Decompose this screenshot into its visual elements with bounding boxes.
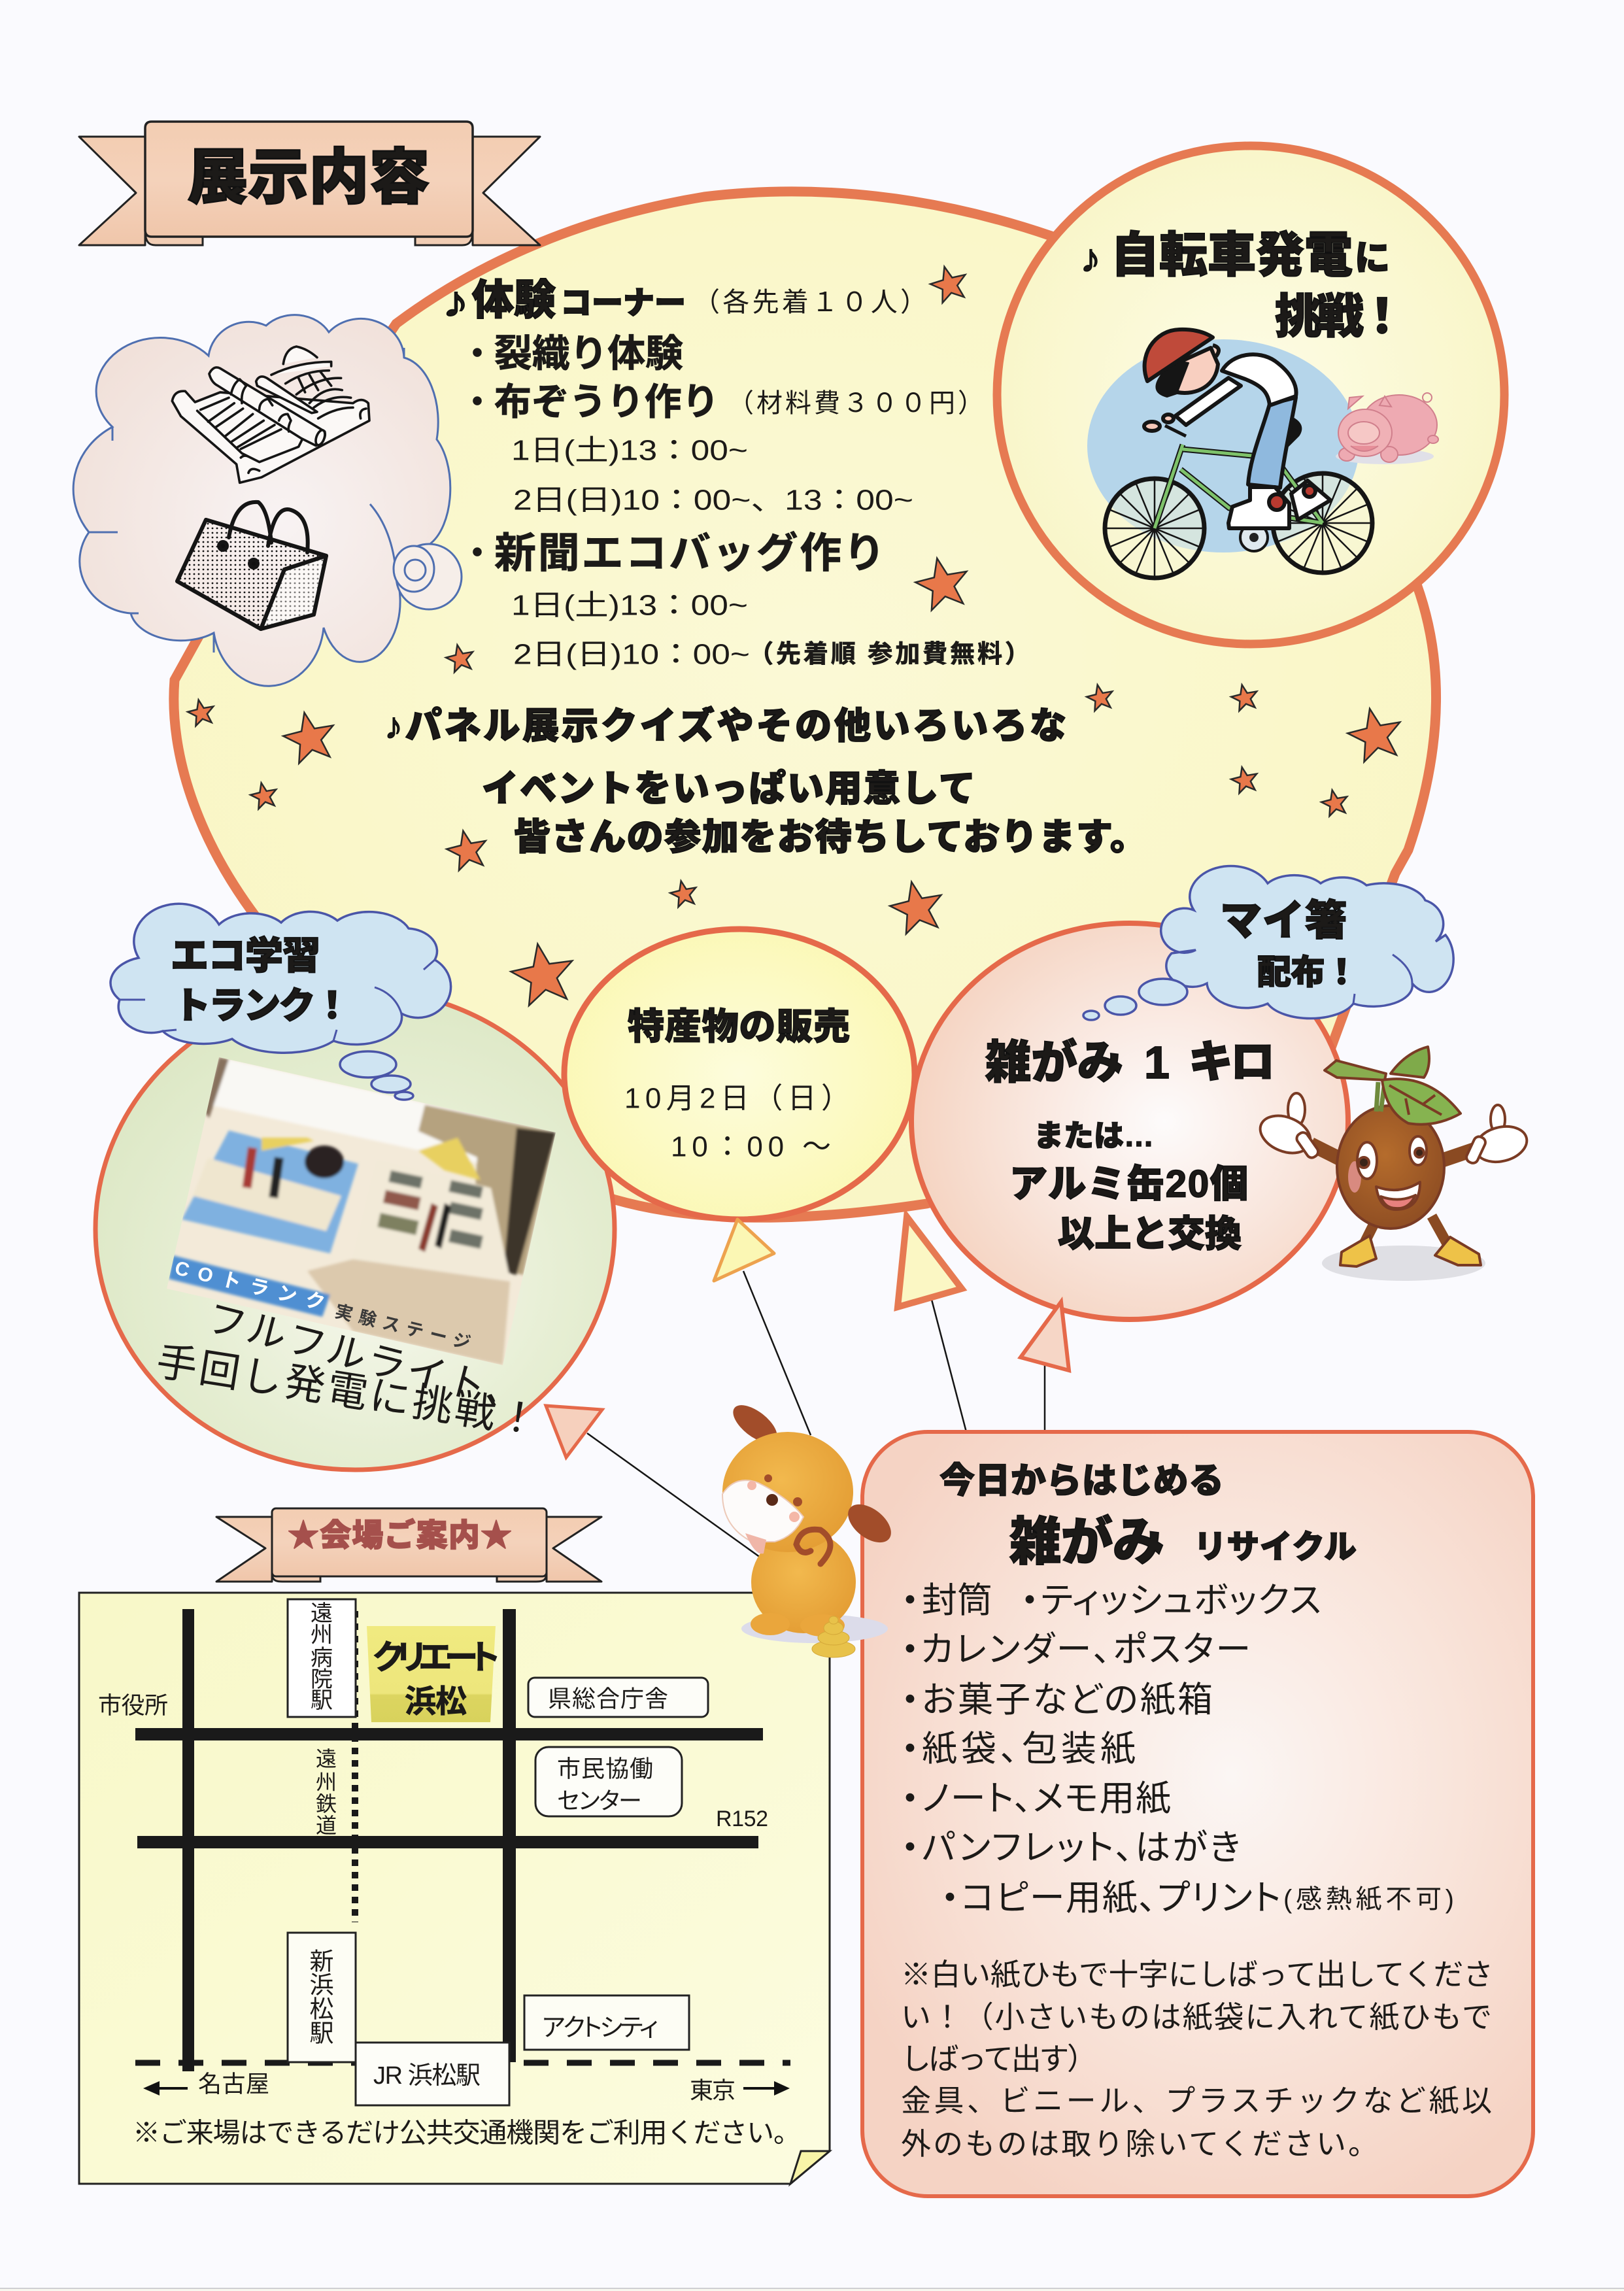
list: accepted paper items: パンフレット、はがき xyxy=(922,1828,1240,1867)
panel: eco learning trunk circle xyxy=(95,989,615,1470)
text block: tying instructions: ※白い紙ひもで十字にしばって出してくださ xyxy=(901,1958,1493,1992)
map label: venue Create Hamamatsu: 浜松 xyxy=(405,1684,467,1720)
map label: Enshu Hospital station: 病 xyxy=(311,1646,333,1671)
photo: eco trunk experiment stage: COトランク xyxy=(173,1257,327,1314)
photo: eco trunk experiment stage: 実験ステージ xyxy=(333,1301,473,1353)
map label: city hall: 市役所 xyxy=(98,1692,168,1718)
map label: Tokyo direction xyxy=(690,2077,790,2104)
map label: Shin-Hamamatsu station: 新 xyxy=(310,1948,333,1975)
list: accepted paper items: ノート、メモ用紙 xyxy=(922,1779,1171,1818)
text block: hands-on corner xyxy=(442,277,1030,671)
map label: citizen center xyxy=(535,1747,682,1816)
text block: hands-on corner: ・ xyxy=(461,535,494,571)
map label: Shin-Hamamatsu station: 松 xyxy=(310,1995,333,2023)
map label: Nagoya direction: 名古屋 xyxy=(198,2070,269,2097)
text block: hands-on corner: （先着順 参加費無料） xyxy=(749,641,1030,668)
text block: tying instructions xyxy=(901,1958,1493,2161)
panel: local products sale bubble: 10：00 ～ xyxy=(671,1131,831,1162)
list: accepted paper items: ・ xyxy=(1013,1582,1046,1619)
icon: paper fold xyxy=(790,2151,830,2184)
panel: mixed paper exchange bubble: 1 xyxy=(1144,1037,1170,1088)
list: accepted paper items: 紙袋、包装紙 xyxy=(922,1729,1136,1769)
map label: Enshu Hospital station: 州 xyxy=(311,1623,333,1648)
map label: citizen center: センター xyxy=(557,1788,642,1814)
icon: rider xyxy=(1144,330,1330,528)
text block: hands-on corner: 体験 xyxy=(472,277,556,324)
text block: hands-on corner: 2日(日)10：00~ xyxy=(513,638,750,671)
icon: golden poop xyxy=(812,1616,855,1657)
list: accepted paper items: お菓子などの紙箱 xyxy=(922,1680,1213,1720)
heading: start today: 今日からはじめる xyxy=(939,1461,1224,1501)
map label: Enshu railway: 道 xyxy=(316,1814,337,1837)
panel: mixed paper exchange bubble: 以上と交換 xyxy=(1058,1213,1242,1254)
icon: eco bag xyxy=(177,502,326,629)
map label: JR Hamamatsu station: JR 浜松駅 xyxy=(373,2062,481,2090)
list: accepted paper items: 封筒 xyxy=(922,1581,992,1620)
map roads xyxy=(135,1609,763,2071)
map label: Shin-Hamamatsu station xyxy=(288,1933,356,2062)
heading: bicycle challenge: 自転車発電 xyxy=(1111,228,1353,282)
map railway lines xyxy=(135,1611,790,2063)
text block: public transport note: ※ご来場はできるだけ公共交通機関をご利用ください。 xyxy=(133,2117,801,2148)
arrow: triangle to exchange bubble xyxy=(1021,1302,1069,1370)
list: accepted paper items xyxy=(894,1581,1454,1918)
panel: local products sale bubble: 特産物の販売 xyxy=(628,1006,850,1047)
panel: mixed paper exchange bubble: アルミ缶20個 xyxy=(1009,1162,1248,1206)
list: accepted paper items: ・ xyxy=(894,1780,926,1817)
map label: Shin-Hamamatsu station: 浜 xyxy=(310,1972,333,1998)
icon: bicycle xyxy=(1105,426,1372,578)
panel: mixed paper exchange bubble: または… xyxy=(1034,1119,1154,1153)
text block: hands-on corner: 裂織り体験 xyxy=(494,332,683,375)
map label: venue Create Hamamatsu: クリエート xyxy=(373,1639,499,1677)
heading: start today xyxy=(939,1461,1357,1570)
map label: Act City: アクトシティ xyxy=(542,2014,658,2042)
map label: Enshu Hospital station: 遠 xyxy=(311,1601,333,1626)
text block: panel quiz announcement: イベントをいっぱい用意して xyxy=(482,768,975,809)
text block: tying instructions: しばって出す） xyxy=(901,2042,1097,2076)
arrow: triangle to sales bubble xyxy=(714,1219,774,1281)
text block: hands-on corner: ・ xyxy=(461,384,494,420)
text block: hands-on corner: 1日(土)13：00~ xyxy=(511,434,748,467)
list: accepted paper items: ・ xyxy=(934,1880,966,1916)
map label: Tokyo direction: 東京 xyxy=(690,2077,736,2104)
map label: prefectural office: 県総合庁舎 xyxy=(548,1686,668,1712)
text block: hands-on corner: コーナー xyxy=(560,286,686,320)
arrow: triangle to main blob xyxy=(898,1217,962,1307)
panel: mixed paper exchange bubble xyxy=(911,923,1348,1319)
cloud tail bubbles xyxy=(340,1051,413,1100)
panel: mixed paper exchange bubble: キロ xyxy=(1189,1038,1275,1087)
cloud: my chopsticks distribution: 配布！ xyxy=(1257,954,1359,992)
list: accepted paper items: (感熱紙不可) xyxy=(1283,1885,1454,1914)
caption: hand-crank generation: 手回し発電に挑戦！ xyxy=(154,1339,541,1444)
list: accepted paper items: ・ xyxy=(894,1731,926,1767)
list: accepted paper items: コピー用紙、プリント xyxy=(961,1878,1281,1918)
heading: bicycle challenge xyxy=(1080,228,1406,343)
map label: venue Create Hamamatsu xyxy=(367,1626,499,1722)
text block: panel quiz announcement: ♪パネル展示クイズやその他いろいろな xyxy=(384,705,1066,747)
map label: citizen center: 市民協働 xyxy=(557,1755,653,1782)
text block: hands-on corner: ・ xyxy=(461,335,494,372)
text block: hands-on corner: 新聞エコバッグ作り xyxy=(494,530,885,577)
banner: venue guide: ★会場ご案内★ xyxy=(288,1518,512,1553)
cloud: eco learning trunk xyxy=(110,904,451,1100)
cloud: my chopsticks distribution: マイ箸 xyxy=(1220,897,1347,944)
list: accepted paper items: ・ xyxy=(894,1829,926,1866)
text block: hands-on corner: 1日(土)13：00~ xyxy=(511,590,748,621)
icon: small thought circles xyxy=(394,544,462,609)
panel: access map xyxy=(79,1593,830,2184)
icon: blue backdrop xyxy=(1087,339,1359,552)
map label: prefectural office xyxy=(528,1678,708,1717)
character: kiwi mascot xyxy=(1255,1047,1531,1281)
text block: tying instructions: い！（小さいものは紙袋に入れて紙ひもで xyxy=(901,2000,1492,2034)
map label: Nagoya direction xyxy=(143,2070,269,2097)
map label: Act City xyxy=(524,1995,689,2050)
arrow: connector lines xyxy=(587,1271,1045,1557)
map label: JR Hamamatsu station xyxy=(356,2043,509,2105)
icon: pig xyxy=(1336,393,1438,464)
panel: mixed paper exchange bubble: 雑がみ xyxy=(985,1037,1123,1088)
map label: Enshu Hospital station: 駅 xyxy=(311,1688,333,1713)
caption: hand-crank generation: フルフルライト、 xyxy=(203,1296,530,1420)
list: accepted paper items: ・ xyxy=(894,1631,926,1668)
text block: hands-on corner: （各先着１０人） xyxy=(693,287,927,317)
text block: hands-on corner: 2日(日)10：00~、13：00~ xyxy=(513,484,913,517)
banner: venue guide xyxy=(216,1508,601,1582)
list: accepted paper items: ・ xyxy=(894,1582,926,1619)
heading: start today: リサイクル xyxy=(1194,1529,1357,1565)
cloud: eco learning trunk: エコ学習 xyxy=(171,935,320,977)
map label: Enshu Hospital station: 院 xyxy=(311,1667,333,1692)
panel: main exhibition blob xyxy=(174,192,1436,1217)
icon: hand loom xyxy=(172,347,369,483)
list: accepted paper items: ティッシュボックス xyxy=(1041,1581,1321,1620)
decorative stars xyxy=(186,262,1406,1008)
heading: start today: 雑がみ xyxy=(1009,1513,1164,1570)
text block: hands-on corner: ♪ xyxy=(442,277,469,326)
text block: panel quiz announcement: 皆さんの参加をお待ちしております。 xyxy=(514,816,1147,858)
map label: Enshu railway: 鉄 xyxy=(316,1792,337,1816)
heading: bicycle challenge: ♪ xyxy=(1080,237,1101,280)
map label: route 152: R152 xyxy=(716,1807,768,1831)
cloud: illustrations of loom and bag xyxy=(73,315,462,686)
cloud tail bubbles xyxy=(1083,979,1187,1020)
arrow: triangle to eco trunk xyxy=(546,1406,602,1457)
map label: Enshu Hospital station xyxy=(288,1599,356,1717)
panel: mixed paper recycling list xyxy=(862,1432,1533,2196)
list: accepted paper items: カレンダー、ポスター xyxy=(921,1630,1251,1669)
list: accepted paper items: ・ xyxy=(894,1682,926,1718)
banner: exhibition contents title: 展示内容 xyxy=(188,144,430,211)
character: dog mascot xyxy=(722,1398,898,1657)
map label: Enshu railway: 州 xyxy=(316,1771,337,1794)
text block: hands-on corner: 布ぞうり作り xyxy=(494,381,719,423)
map label: Enshu railway xyxy=(316,1747,337,1837)
panel: local products sale bubble: 10月2日（日） xyxy=(624,1083,850,1114)
panel: local products sale bubble xyxy=(564,929,915,1219)
text block: tying instructions: 金具、ビニール、プラスチックなど紙以 xyxy=(901,2084,1492,2118)
photo: eco trunk experiment stage xyxy=(167,1057,556,1365)
map label: Enshu railway: 遠 xyxy=(316,1747,337,1771)
heading: bicycle challenge: に xyxy=(1355,239,1390,278)
panel: bicycle power generation circle xyxy=(997,146,1504,644)
cloud: my chopsticks distribution xyxy=(1083,866,1453,1020)
heading: bicycle challenge: 挑戦！ xyxy=(1275,291,1406,343)
text block: hands-on corner: （材料費３００円） xyxy=(728,389,984,418)
map label: Shin-Hamamatsu station: 駅 xyxy=(310,2020,333,2046)
text block: tying instructions: 外のものは取り除いてください。 xyxy=(901,2127,1378,2161)
text block: panel quiz announcement xyxy=(384,705,1147,858)
cloud: eco learning trunk: トランク！ xyxy=(174,985,350,1027)
banner: exhibition contents title xyxy=(79,122,540,245)
